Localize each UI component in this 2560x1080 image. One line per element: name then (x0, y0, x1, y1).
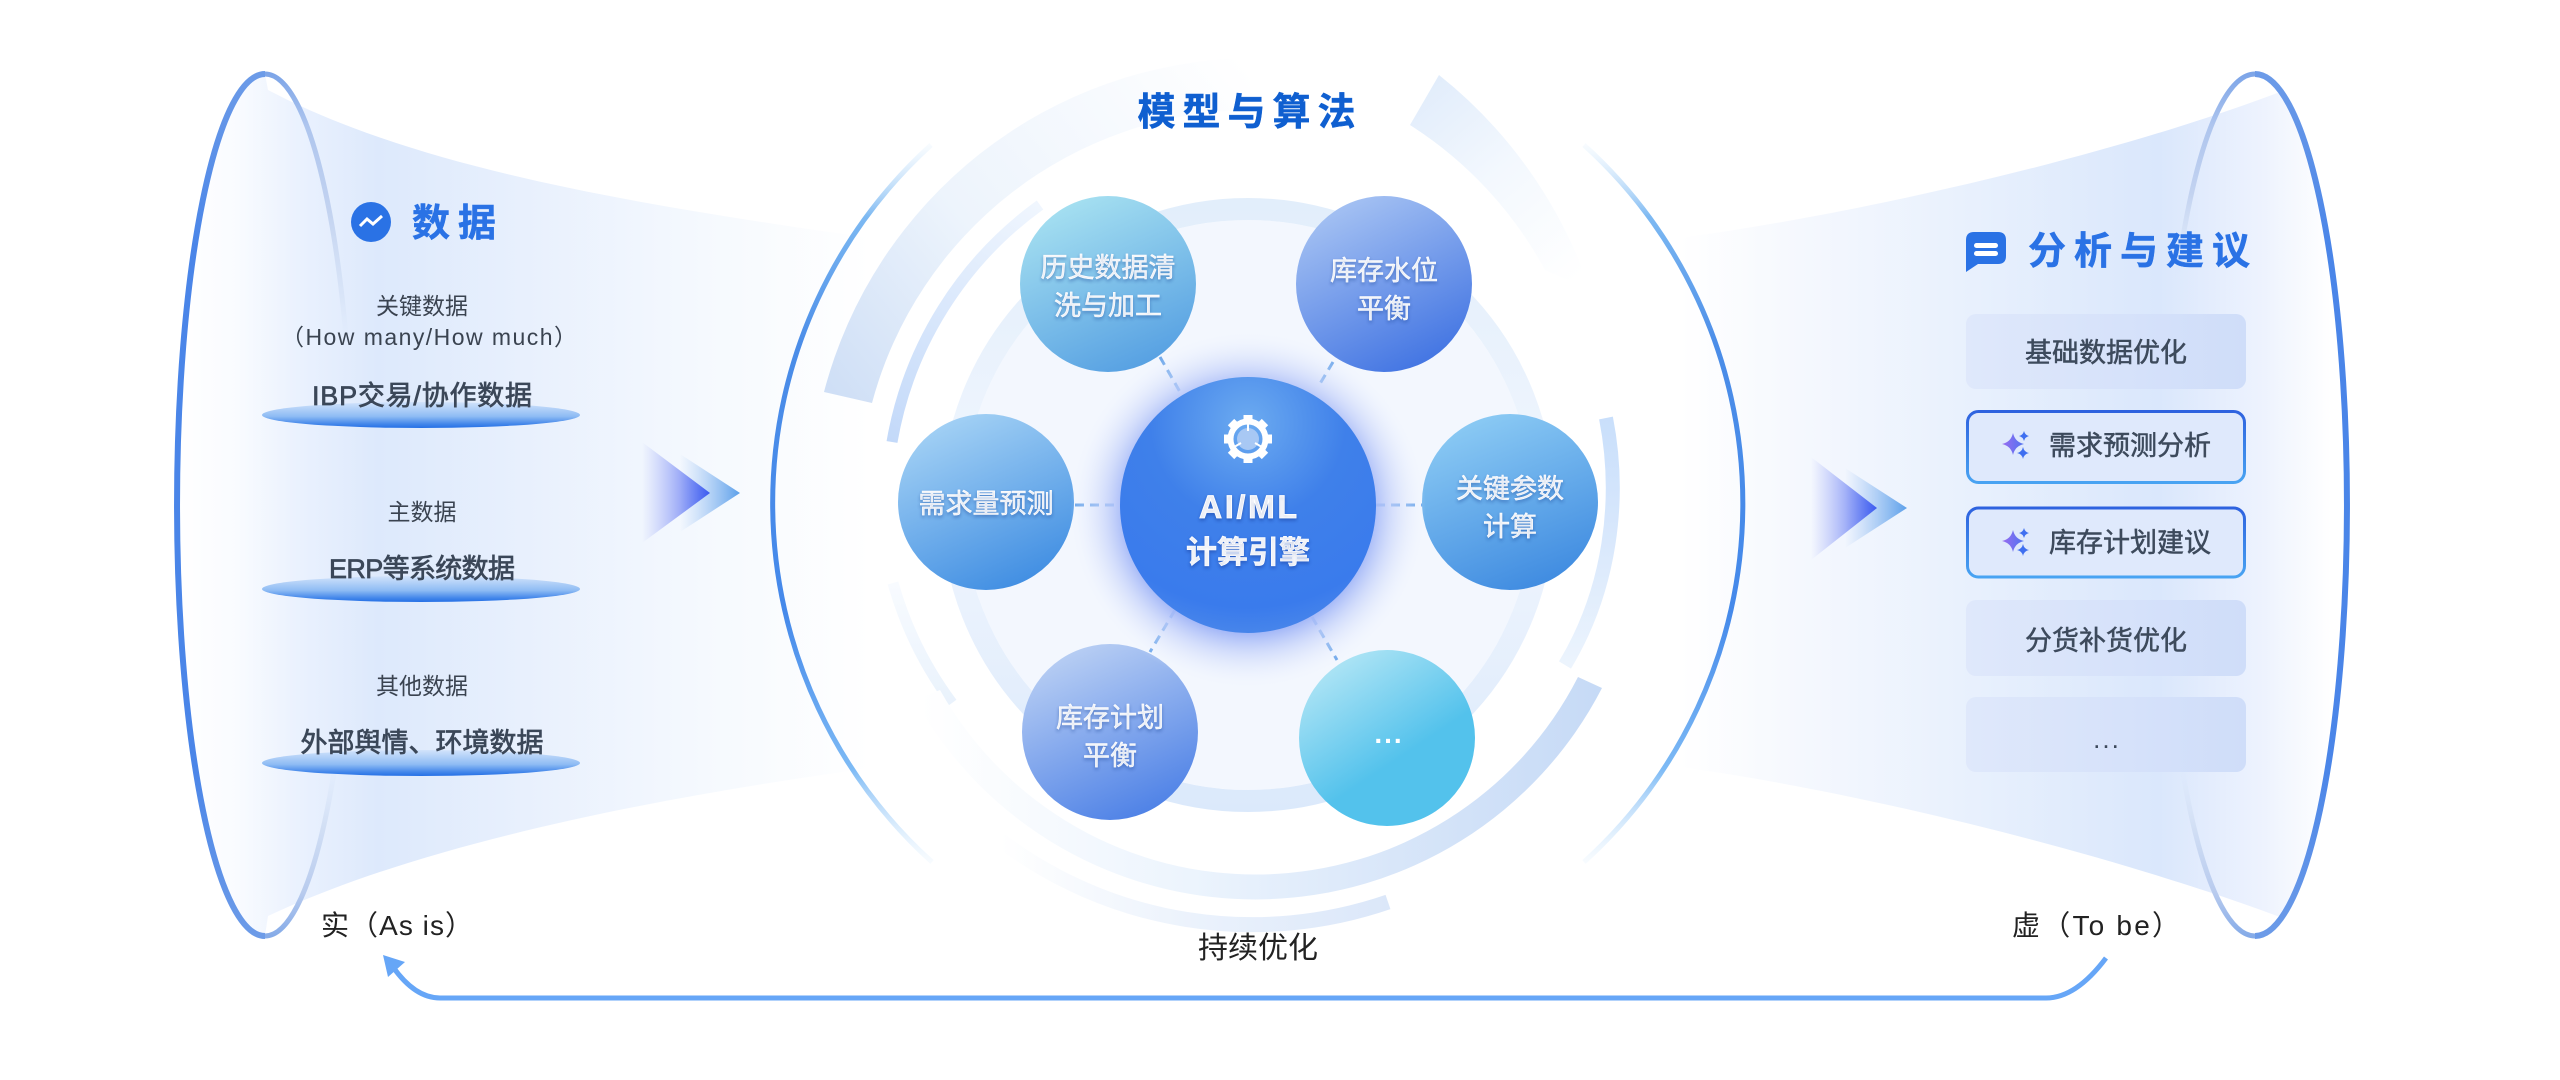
title: models and algorithms: 模型与算法 (1137, 92, 1363, 134)
node: inventory level balance (1296, 196, 1472, 372)
node: historical data cleaning: 洗与加工 (1054, 291, 1162, 321)
node: demand forecast (898, 414, 1074, 590)
label: continuous optimization: 持续优化 (1198, 932, 1318, 965)
node: inventory level balance: 平衡 (1357, 294, 1411, 324)
dashed connectors (1075, 357, 1423, 660)
panel: right funnel (analysis, to be) (1680, 74, 2347, 936)
card: demand forecast analysis (1968, 412, 2244, 482)
icon: chat bubble (1966, 232, 2006, 272)
icon: sparkle (2002, 528, 2029, 556)
card: allocation optimization (1966, 600, 2246, 676)
arrow: data to model (642, 442, 740, 543)
node: more (1299, 650, 1475, 826)
source: external: 外部舆情、环境数据 (300, 728, 544, 758)
text: key data (281, 293, 577, 350)
card: more (1966, 697, 2246, 772)
source: IBP (262, 381, 580, 428)
node: inventory plan balance: 库存计划 (1056, 703, 1164, 733)
node: key parameter calculation: 关键参数 (1456, 474, 1564, 504)
panel: left funnel (data, as is) (177, 74, 870, 936)
node: inventory plan balance: 平衡 (1083, 741, 1137, 771)
node: inventory level balance: 库存水位 (1330, 256, 1438, 286)
node: AI/ML compute engine: 计算引擎 (1186, 535, 1310, 570)
node: demand forecast: 需求量预测 (918, 489, 1054, 519)
source: IBP: IBP交易/协作数据 (312, 381, 532, 411)
node: key parameter calculation (1422, 414, 1598, 590)
panel: analysis and recommendations (1966, 231, 2258, 772)
icon: data trend (351, 202, 391, 242)
arrow: feedback loop (383, 955, 2106, 998)
node: more: ... (1374, 718, 1404, 749)
text: master data: 主数据 (388, 499, 456, 525)
card: demand forecast analysis: 需求预测分析 (2049, 431, 2211, 461)
icon: sparkle (2002, 431, 2029, 459)
source: ERP: ERP等系统数据 (329, 554, 515, 584)
text: other data: 其他数据 (376, 673, 468, 699)
card: inventory plan suggestion: 库存计划建议 (2049, 528, 2211, 558)
heading: analysis: 分析与建议 (2028, 231, 2258, 273)
node: inventory plan balance (1022, 644, 1198, 820)
right ellipse rim (2163, 74, 2347, 936)
icon: gear (1224, 415, 1272, 463)
text: key data: （How many/How much） (281, 324, 577, 350)
card: base data optimization: 基础数据优化 (2025, 338, 2187, 368)
outer blue arcs (773, 145, 1743, 862)
node: AI/ML compute engine (1070, 332, 1426, 688)
card: base data optimization (1966, 314, 2246, 389)
source: ERP (262, 554, 580, 602)
heading: data: 数据 (412, 203, 504, 245)
node: historical data cleaning: 历史数据清 (1040, 253, 1176, 283)
node: historical data cleaning (1020, 196, 1196, 372)
left ellipse rim (177, 74, 353, 936)
node: AI/ML compute engine: AI/ML (1199, 489, 1297, 525)
panel: data (262, 202, 580, 776)
node: key parameter calculation: 计算 (1483, 512, 1537, 542)
arrow: model to analysis (1811, 457, 1907, 560)
card: allocation optimization: 分货补货优化 (2025, 626, 2187, 656)
source: external (262, 728, 580, 776)
card: inventory plan suggestion (1968, 508, 2244, 577)
label: as is: 实（As is） (321, 910, 473, 941)
panel: model and algorithm concentric arcs (773, 58, 1743, 925)
text: key data: 关键数据 (376, 293, 468, 319)
label: to be: 虚（To be） (2012, 910, 2180, 941)
card: more: ... (2093, 724, 2121, 754)
